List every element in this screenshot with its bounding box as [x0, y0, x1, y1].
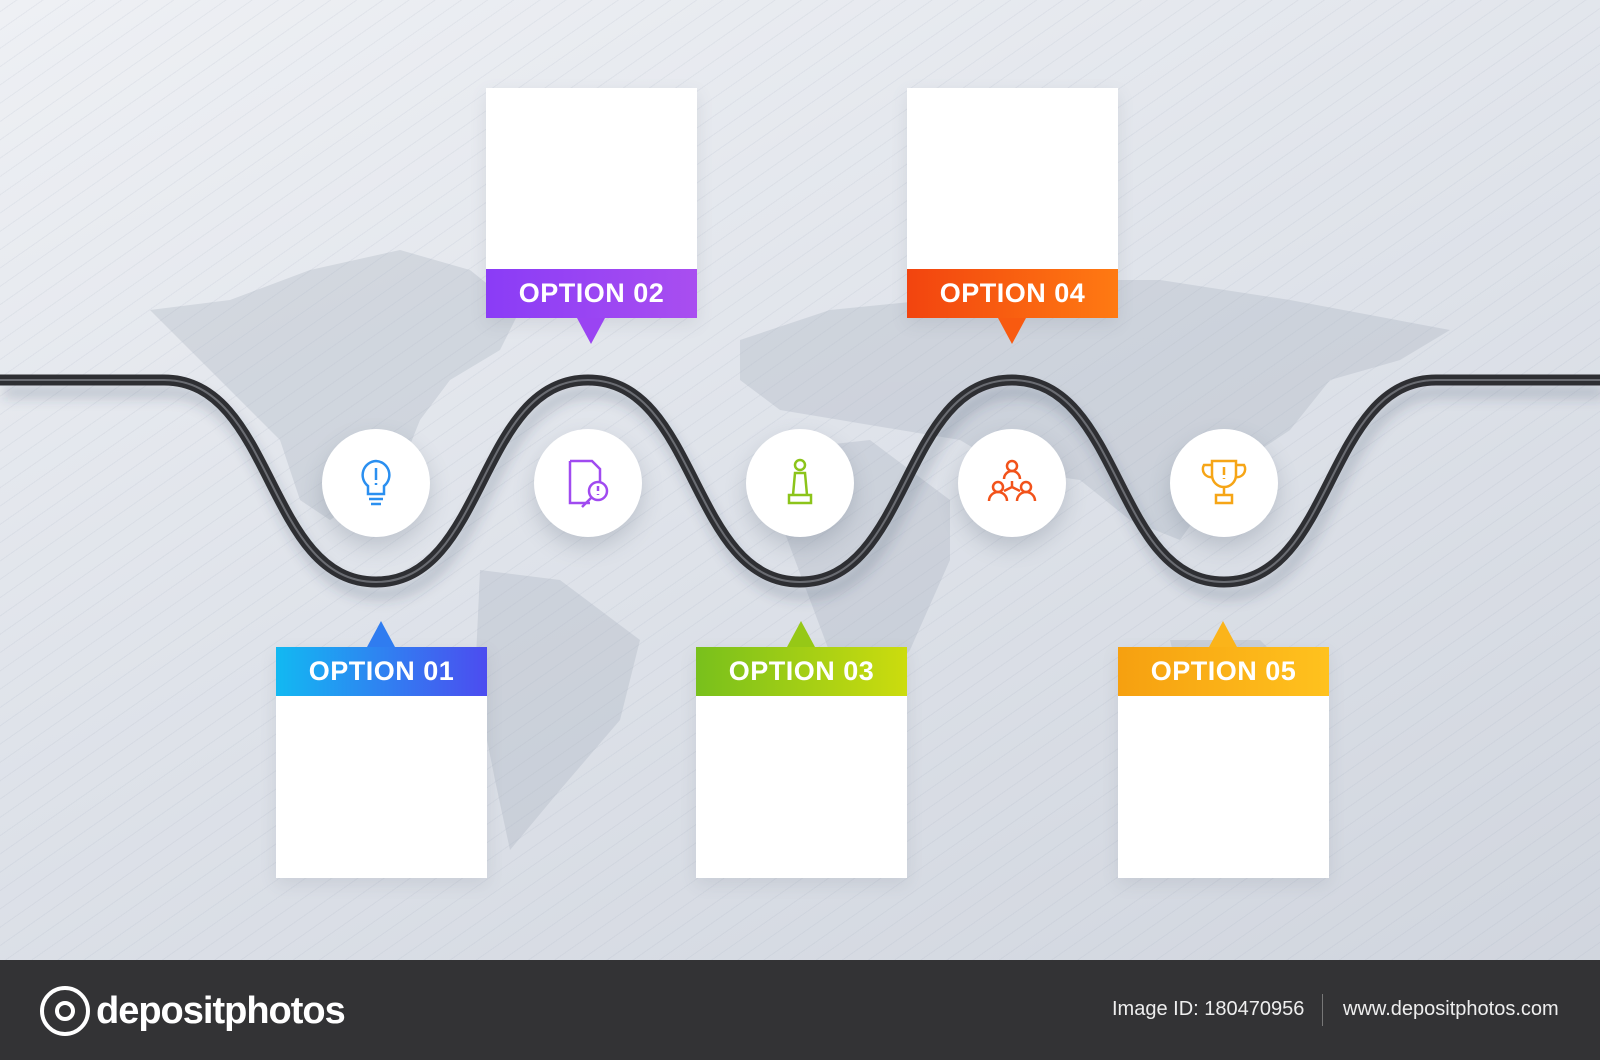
pointer 01 — [367, 621, 395, 647]
header: option 05: OPTION 05 — [1151, 656, 1296, 686]
icon circle 1: bulb — [322, 429, 430, 537]
header: option 03: OPTION 03 — [729, 656, 874, 686]
icon circle 5: trophy — [1170, 429, 1278, 537]
pointer 02 — [577, 318, 605, 344]
header: option 01: OPTION 01 — [309, 656, 454, 686]
card: option 04 — [907, 88, 1118, 318]
icon circle 2: document search — [534, 429, 642, 537]
header: option 05 — [1118, 647, 1329, 696]
footer image id: Image ID: 180470956 — [1112, 998, 1304, 1020]
pointer 03 — [787, 621, 815, 647]
header: option 01 — [276, 647, 487, 696]
icon circle 4: team — [958, 429, 1066, 537]
header: option 04 — [907, 269, 1118, 318]
pointer 04 — [998, 318, 1026, 344]
footer — [0, 960, 1600, 1060]
footer logo: depositphotos — [96, 990, 345, 1032]
header: option 02: OPTION 02 — [519, 278, 664, 308]
header: option 03 — [696, 647, 907, 696]
footer url: www.depositphotos.com — [1343, 998, 1559, 1020]
icon circle 3: chess pawn — [746, 429, 854, 537]
card: option 01 — [276, 647, 487, 878]
footer logo — [40, 986, 345, 1036]
card: option 05 — [1118, 647, 1329, 878]
header: option 02 — [486, 269, 697, 318]
header: option 04: OPTION 04 — [940, 278, 1085, 308]
pointer 05 — [1209, 621, 1237, 647]
card: option 03 — [696, 647, 907, 878]
card: option 02 — [486, 88, 697, 318]
